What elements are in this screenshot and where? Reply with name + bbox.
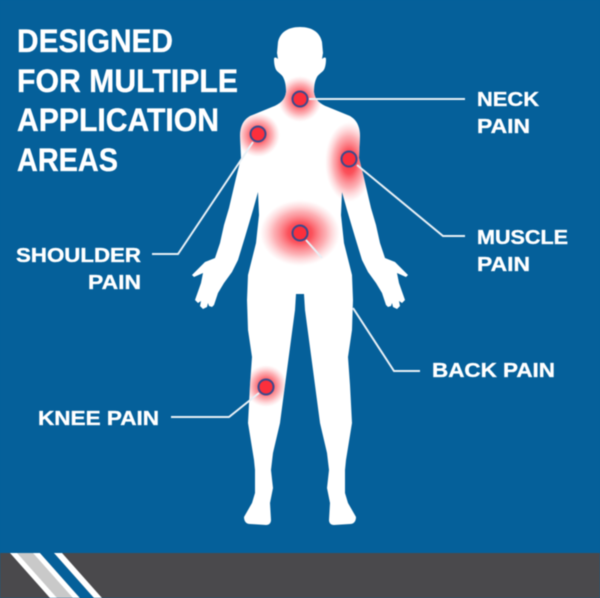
title: FOR MULTIPLE: [17, 63, 238, 99]
label: neck pain: [477, 89, 540, 138]
title: [17, 23, 238, 178]
footer band: [0, 553, 600, 598]
label: knee pain: KNEE PAIN: [38, 408, 159, 430]
label: shoulder pain: [16, 245, 142, 294]
body silhouette: [192, 27, 408, 525]
pain markers: [250, 92, 356, 394]
label: muscle pain: PAIN: [477, 254, 530, 276]
pain glows: [236, 76, 373, 407]
label: muscle pain: MUSCLE: [477, 227, 568, 249]
title: DESIGNED: [17, 23, 173, 59]
title: APPLICATION: [17, 102, 219, 138]
title: AREAS: [17, 142, 118, 178]
label: shoulder pain: SHOULDER: [16, 245, 142, 267]
label: shoulder pain: PAIN: [88, 272, 141, 294]
label: muscle pain: [477, 227, 568, 276]
label: back pain: BACK PAIN: [432, 360, 555, 382]
label: neck pain: PAIN: [477, 116, 530, 138]
label: neck pain: NECK: [477, 89, 540, 111]
leader lines: [152, 99, 465, 417]
